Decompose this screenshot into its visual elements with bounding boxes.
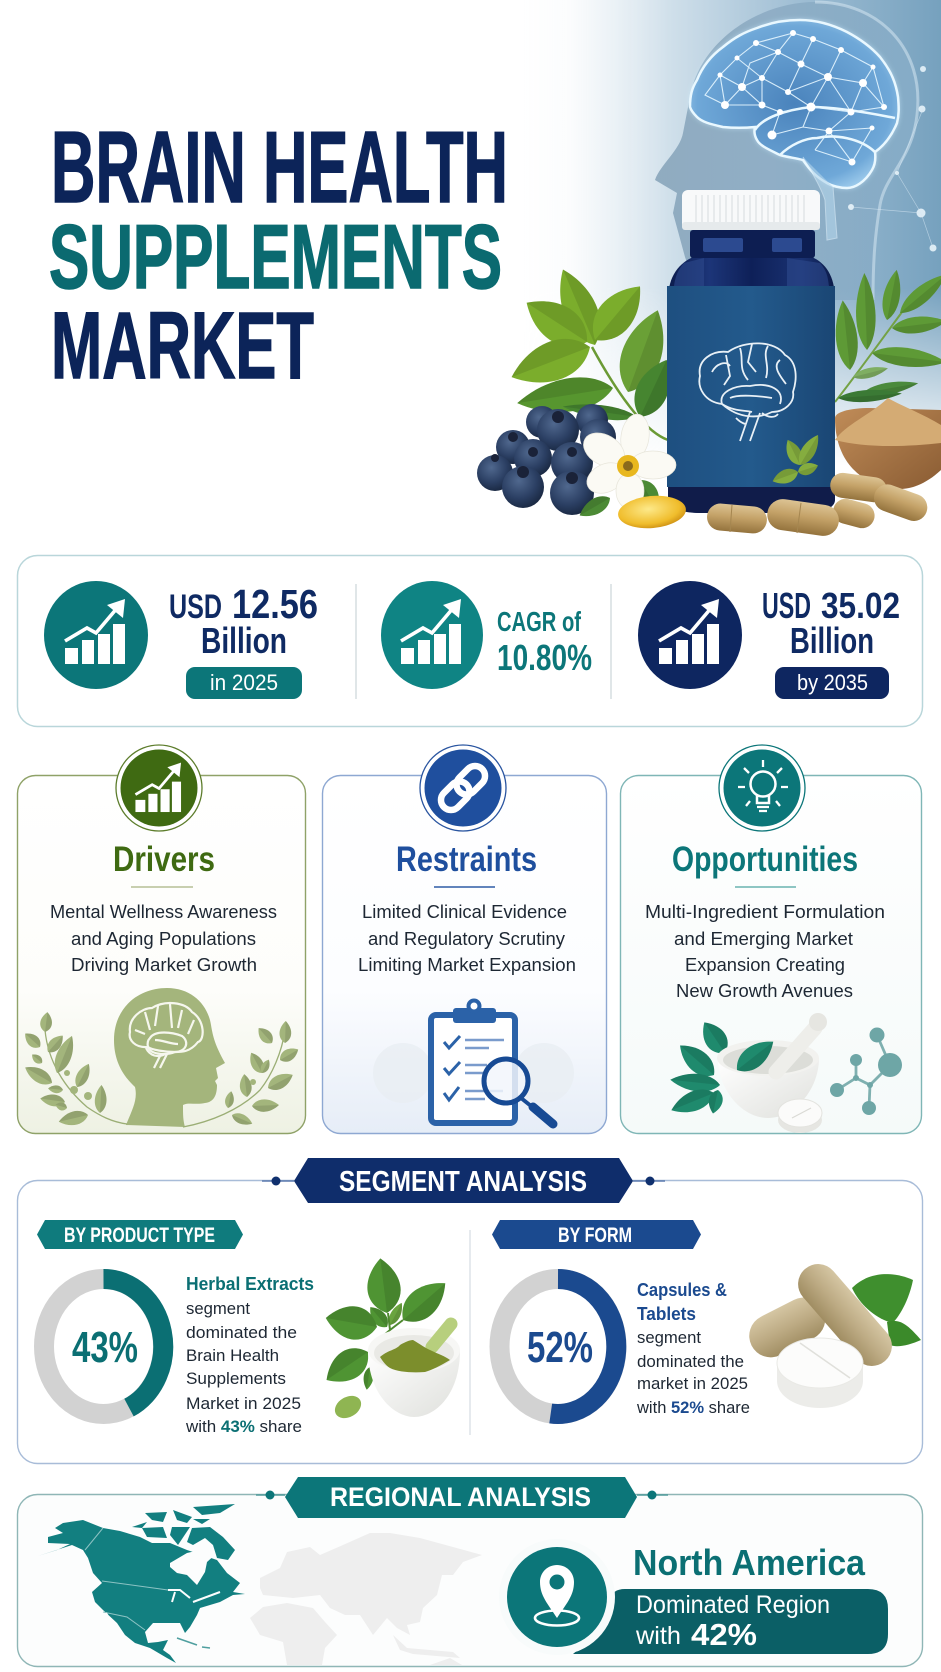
white flower xyxy=(576,412,676,522)
panel: restraints xyxy=(322,745,606,1134)
stat: USD 35.02 Billion by 2035: USD xyxy=(762,585,811,626)
text: drivers description xyxy=(50,902,277,975)
glowing brain network xyxy=(690,20,899,240)
text: opportunities description: New Growth Avenues xyxy=(676,981,853,1001)
stat: USD 12.56 Billion in 2025 xyxy=(44,581,318,699)
banner: segment analysis: SEGMENT ANALYSIS xyxy=(339,1166,587,1198)
icon: brain outline on label xyxy=(699,343,796,441)
text: capsules and tablets: with 52% share xyxy=(636,1398,750,1417)
icon: location pin xyxy=(535,1565,579,1626)
panel: drivers xyxy=(18,745,306,1134)
icon: chain link xyxy=(420,745,506,831)
text: capsules and tablets xyxy=(636,1280,750,1417)
text: herbal extracts: Brain Health xyxy=(186,1346,279,1365)
donut chart: 43 percent: 43% xyxy=(72,1323,138,1372)
stat: USD 35.02 Billion by 2035: Billion xyxy=(790,620,874,661)
hero illustration xyxy=(477,0,941,538)
text: capsules and tablets: Tablets xyxy=(637,1304,696,1324)
text: restraints description: and Regulatory Scrutiny xyxy=(368,929,565,949)
banner: regional analysis: REGIONAL ANALYSIS xyxy=(330,1482,591,1512)
banner: segment analysis xyxy=(262,1158,665,1203)
icon: sprout on label xyxy=(770,431,824,488)
text: capsules and tablets: dominated the xyxy=(637,1352,744,1371)
donut chart: 43 percent xyxy=(44,1279,163,1414)
text: restraints description: Limiting Market Expansion xyxy=(358,955,576,975)
text: herbal extracts xyxy=(185,1274,314,1436)
donut chart: 52 percent: 52% xyxy=(527,1323,593,1372)
stat: CAGR of 10.80%: CAGR of xyxy=(497,606,581,637)
text: opportunities description: and Emerging Market xyxy=(674,929,853,949)
tan capsules xyxy=(706,471,931,538)
text: capsules and tablets: segment xyxy=(637,1328,701,1347)
map: north america highlighted xyxy=(38,1504,245,1663)
supplement bottle xyxy=(667,190,835,513)
panel: opportunities xyxy=(620,745,922,1134)
callout: north america dominated region: with xyxy=(635,1622,681,1650)
blueberries xyxy=(477,404,616,515)
heading: restraints: Restraints xyxy=(396,840,537,879)
text: capsules and tablets: Capsules & xyxy=(637,1280,727,1300)
world map background xyxy=(250,1533,482,1665)
stat: USD 35.02 Billion by 2035 xyxy=(638,581,900,699)
text: drivers description: and Aging Populations xyxy=(71,929,256,949)
text: capsules and tablets: market in 2025 xyxy=(637,1374,748,1393)
text: herbal extracts: Supplements xyxy=(186,1369,286,1388)
tab: by form: BY FORM xyxy=(558,1224,632,1247)
text: drivers description: Mental Wellness Awareness xyxy=(50,902,277,922)
callout: north america dominated region: 42% xyxy=(691,1617,757,1652)
heading: opportunities: Opportunities xyxy=(672,840,858,879)
stat: USD 35.02 Billion by 2035: 35.02 xyxy=(821,585,900,626)
callout: north america dominated region xyxy=(499,1539,888,1655)
text: restraints description xyxy=(358,902,576,975)
illustration: mortar, leaves and molecule xyxy=(668,1013,902,1133)
text: herbal extracts: dominated the xyxy=(186,1323,297,1342)
text: opportunities description: Expansion Creating xyxy=(685,955,845,975)
title line 1: BRAIN HEALTH xyxy=(51,112,508,224)
text: herbal extracts: Market in 2025 xyxy=(186,1394,301,1413)
illustration: herbs and mortar xyxy=(318,1256,460,1423)
panel: key statistics xyxy=(18,556,922,726)
head silhouette xyxy=(655,2,936,300)
text: opportunities description: Multi-Ingredient Formulation xyxy=(645,902,885,922)
tab: by product type xyxy=(37,1220,243,1249)
text: drivers description: Driving Market Growth xyxy=(71,955,257,975)
panel: regional analysis xyxy=(18,1477,922,1666)
left botanical leaves xyxy=(505,263,681,440)
stat: CAGR of 10.80% xyxy=(381,581,592,689)
stat: USD 12.56 Billion in 2025: 12.56 xyxy=(232,581,318,627)
text: herbal extracts: with 43% share xyxy=(185,1417,302,1436)
stat: USD 35.02 Billion by 2035: by 2035 xyxy=(797,670,868,695)
icon: drivers growth chart xyxy=(116,745,202,831)
text: opportunities description xyxy=(645,902,885,1001)
callout: north america dominated region: Dominated Region xyxy=(636,1591,830,1619)
text: herbal extracts: segment xyxy=(186,1299,250,1318)
callout: north america dominated region: North America xyxy=(633,1542,866,1583)
illustration: capsules and tablet xyxy=(742,1256,921,1408)
title line 2: SUPPLEMENTS xyxy=(49,207,502,308)
heading: drivers: Drivers xyxy=(113,840,215,879)
icon: light bulb xyxy=(719,745,805,831)
donut chart: 52 percent xyxy=(500,1279,616,1414)
hero blue background xyxy=(583,0,941,452)
stat: USD 12.56 Billion in 2025: USD xyxy=(169,588,222,626)
illustration: clipboard and magnifier xyxy=(373,1000,574,1124)
banner: regional analysis xyxy=(256,1477,668,1518)
softgel capsule xyxy=(617,493,687,531)
right botanical leaves xyxy=(832,268,941,404)
stat: CAGR of 10.80%: 10.80% xyxy=(497,637,592,678)
illustration: head with brain and laurel xyxy=(21,988,301,1128)
panel: segment analysis xyxy=(18,1158,922,1464)
text: restraints description: Limited Clinical Evidence xyxy=(362,902,567,922)
tab: by product type: BY PRODUCT TYPE xyxy=(64,1224,215,1247)
text: herbal extracts: Herbal Extracts xyxy=(186,1274,314,1294)
title line 3: MARKET xyxy=(51,293,314,399)
stat: USD 12.56 Billion in 2025: Billion xyxy=(201,620,287,661)
tab: by form xyxy=(492,1220,701,1249)
wooden bowl of powder xyxy=(835,398,941,489)
stat: USD 12.56 Billion in 2025: in 2025 xyxy=(210,670,278,695)
title xyxy=(49,112,508,399)
